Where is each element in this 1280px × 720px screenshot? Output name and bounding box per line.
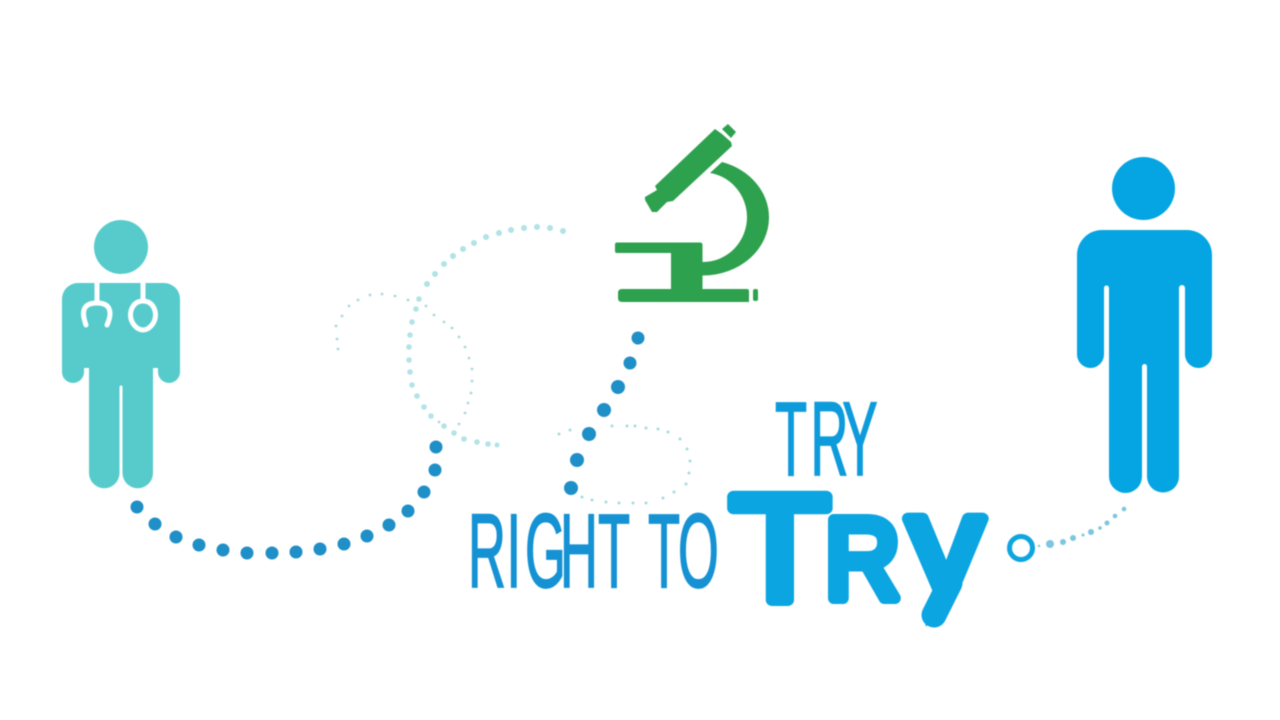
- icon: patient: [1077, 157, 1212, 493]
- title: Try (bold large): R: [825, 497, 900, 623]
- dotted path: doctor to loop: [130, 440, 442, 560]
- dotted path: up to microscope: [564, 332, 644, 495]
- title: Try (top small): TRY: [775, 380, 878, 498]
- dotted loop: small faint arc: [335, 293, 473, 425]
- icon: microscope: [615, 124, 769, 302]
- dotted loop: faint ring near title: [558, 424, 692, 504]
- icon: doctor with stethoscope: [62, 220, 180, 488]
- title: Right to: RIGHT TO: [468, 492, 719, 610]
- title: Try (bold large): T: [730, 465, 830, 633]
- dotted loop: large faint ring: [406, 224, 566, 448]
- title: Try (bold large): y: [908, 468, 983, 621]
- title: Try (bold large): [730, 465, 983, 642]
- dotted path: title ring to patient: [1010, 507, 1126, 560]
